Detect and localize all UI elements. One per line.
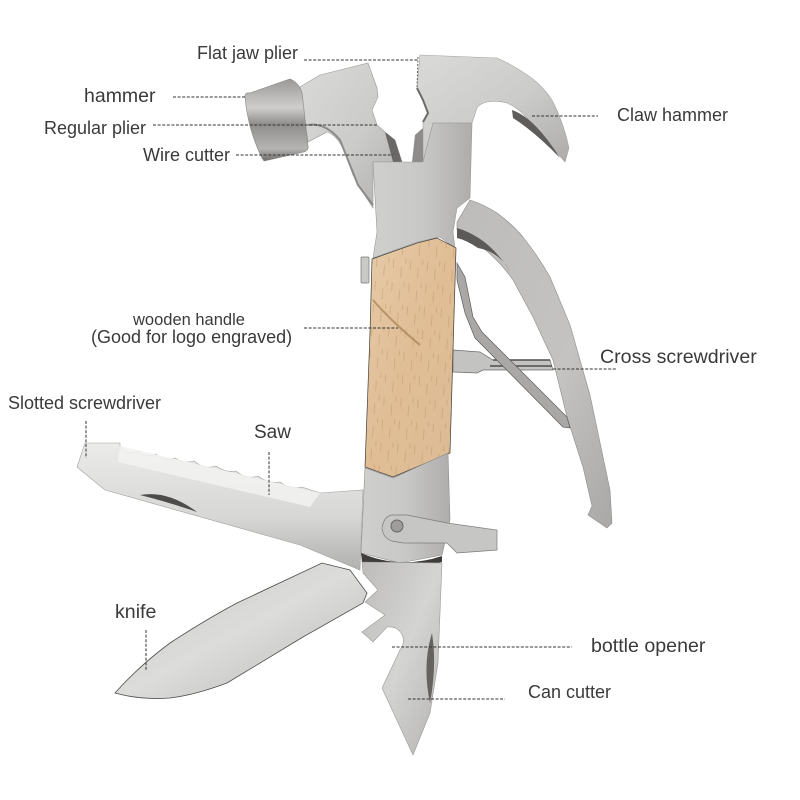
label: Saw [254, 422, 291, 495]
icon: knife blade [115, 563, 367, 698]
label: wooden handle: wooden handle [132, 311, 245, 329]
icon: claw hammer head [412, 55, 569, 162]
label: Wire cutter: Wire cutter [143, 145, 230, 165]
label: wooden handle [91, 311, 398, 347]
label: knife [115, 601, 156, 670]
icon: cross screwdriver and folding bracket [453, 263, 570, 428]
label: Can cutter: Can cutter [528, 682, 611, 702]
icon: lower metal body and lever [361, 453, 497, 568]
label: Claw hammer: Claw hammer [617, 105, 728, 125]
icon: upper metal body [361, 123, 472, 283]
icon: right handle arm [457, 200, 612, 528]
icon: plier and hammer head [245, 63, 402, 208]
label: bottle opener: bottle opener [591, 635, 706, 657]
label: Cross screwdriver: Cross screwdriver [600, 346, 757, 368]
label: Saw: Saw [254, 422, 291, 443]
icon: wooden handle [365, 238, 456, 477]
icon: saw and slotted screwdriver blade [77, 443, 363, 570]
label: wooden handle: (Good for logo engraved) [91, 327, 292, 347]
label: hammer: hammer [84, 85, 156, 107]
label: Regular plier: Regular plier [44, 118, 146, 138]
label: knife: knife [115, 601, 156, 623]
label: Slotted screwdriver: Slotted screwdriver [8, 393, 161, 413]
icon: bottle opener and can cutter [362, 562, 442, 755]
label: Flat jaw plier: Flat jaw plier [197, 43, 298, 63]
